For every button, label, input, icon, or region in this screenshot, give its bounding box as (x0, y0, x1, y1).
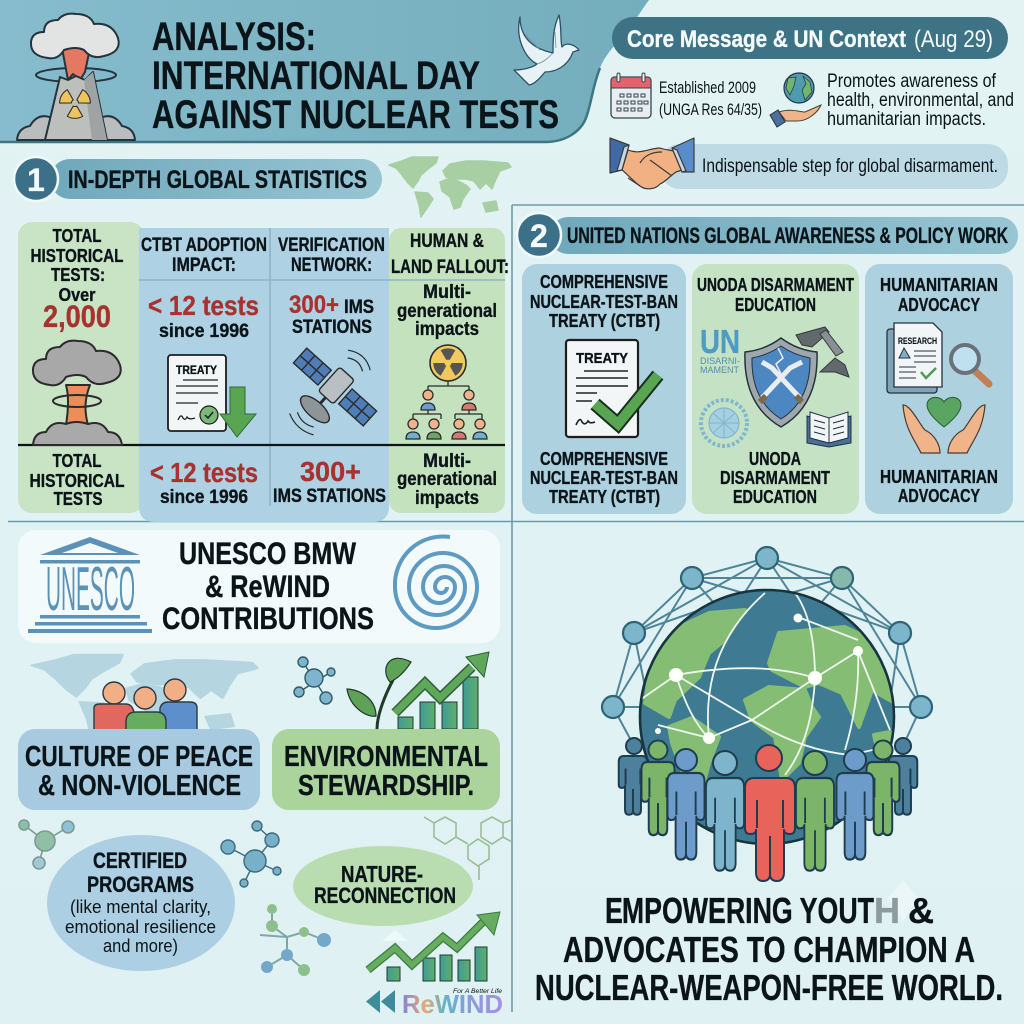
closing statement: EMPOWERING YOUTH & (605, 890, 934, 931)
panel: UNODA card (692, 264, 859, 514)
column 1 text: HISTORICAL (30, 470, 124, 491)
icon: research document: RESEARCH (898, 336, 937, 346)
column 2 text: since 1996 (160, 486, 248, 508)
section 2 heading (517, 213, 1018, 257)
promotes awareness text: humanitarian impacts. (827, 109, 986, 130)
icon: mushroom cloud (33, 341, 122, 445)
world map blue (32, 655, 258, 736)
icon: three people (94, 679, 197, 730)
panel: UNODA card: UNODA (749, 448, 801, 469)
title (152, 15, 559, 137)
panel: culture of peace: & NON-VIOLENCE (38, 770, 241, 802)
column 4 text: generational (397, 468, 497, 490)
column 3 text: IMS STATIONS (273, 486, 386, 507)
section 1 heading: IN-DEPTH GLOBAL STATISTICS (68, 166, 367, 194)
panel: nature reconnection: RECONNECTION (314, 883, 456, 908)
panel: CTBT card: NUCLEAR-TEST-BAN (530, 291, 678, 312)
promotes awareness text: Promotes awareness of (827, 71, 997, 92)
icon: research document (887, 323, 942, 393)
panel: humanitarian card (865, 264, 1013, 514)
panel: UNESCO heading: UNESCO BMW (179, 535, 356, 571)
panel: humanitarian card: ADVOCACY (898, 294, 981, 315)
panel: certified programs: PROGRAMS (87, 872, 194, 897)
icon: handshake (610, 138, 694, 189)
crowd of people (619, 738, 917, 881)
ReWIND logo: For A Better Life (453, 988, 502, 995)
column 2 text (141, 235, 267, 508)
promotes awareness text (827, 71, 1014, 130)
panel: certified programs (47, 835, 235, 971)
title: AGAINST NUCLEAR TESTS (152, 93, 559, 137)
closing statement (535, 890, 1003, 1008)
title: ANALYSIS: (152, 15, 316, 59)
panel: CTBT card (522, 264, 686, 514)
UN disarmament label: MAMENT (700, 365, 739, 375)
column 4 text: LAND FALLOUT: (391, 257, 509, 278)
column 1 text: HISTORICAL (30, 245, 124, 266)
panel: CTBT card: TREATY (CTBT) (549, 486, 660, 507)
column 4 text: impacts (415, 318, 479, 340)
icon: heart and hands (903, 397, 985, 453)
column 3 text: 300+ (289, 291, 339, 319)
panel: UNODA card: EDUCATION (735, 294, 816, 315)
column 1 text: 2,000 (43, 298, 111, 334)
column 4 text (391, 231, 509, 509)
panel: environmental stewardship: ENVIRONMENTAL (284, 741, 488, 773)
panel: CTBT card: COMPREHENSIVE (540, 271, 668, 292)
UN disarmament label (700, 323, 740, 375)
panel: nature reconnection (293, 846, 473, 926)
column 2 text: CTBT ADOPTION (141, 235, 267, 256)
icon: broken weapon (796, 327, 849, 377)
core message heading pill: (Aug 29) (914, 26, 993, 53)
icon: molecule upper left (19, 820, 74, 869)
column 1 text: TOTAL (52, 450, 102, 471)
established text: Established 2009 (659, 78, 756, 97)
column 4 text: Multi- (423, 281, 471, 303)
panel: UNODA card: DISARMAMENT (720, 467, 831, 488)
divider lines (8, 205, 1024, 1012)
icon: UN emblem (701, 400, 747, 446)
icon: treaty document with check mark: TREATY (576, 350, 628, 367)
icon: treaty document with down arrow (168, 355, 256, 437)
icon: satellite (264, 325, 397, 459)
column 3 text: STATIONS (292, 317, 372, 338)
icon: globe in hand (770, 73, 821, 127)
column 4 text: generational (397, 300, 497, 322)
header banner (0, 0, 649, 142)
panel: CTBT card: TREATY (CTBT) (549, 310, 660, 331)
panel: CTBT card: COMPREHENSIVE (540, 448, 668, 469)
icon: radiation family tree (406, 345, 487, 439)
panel: humanitarian card: HUMANITARIAN (880, 466, 998, 487)
panel: nature reconnection: NATURE- (341, 861, 423, 887)
globe network illustration (602, 547, 932, 881)
column 2 text: IMPACT: (172, 255, 236, 276)
icon: magnifier (951, 345, 989, 384)
column 1 text: TESTS: (51, 264, 105, 285)
column 2 text: < 12 tests (148, 290, 259, 321)
white watermark diamond (888, 880, 918, 922)
column 1 text: TESTS (54, 488, 102, 509)
network lines and nodes (602, 547, 932, 750)
icon: shield with swords (745, 338, 817, 427)
column 4 text: HUMAN & (410, 231, 484, 252)
column 3 text: 300+ (300, 456, 361, 487)
established text (659, 78, 762, 119)
column 2 text: < 12 tests (150, 457, 258, 488)
column 3 text: VERIFICATION (278, 235, 385, 256)
column 1 text: Over (58, 284, 96, 305)
panel: certified programs: (like mental clarity, (70, 896, 211, 917)
UN disarmament label: UN (700, 323, 740, 360)
established text: (UNGA Res 64/35) (659, 100, 762, 119)
panel: humanitarian card: HUMANITARIAN (880, 274, 998, 295)
icon: open book (807, 412, 851, 447)
panel: CTBT card: NUCLEAR-TEST-BAN (530, 467, 678, 488)
icon: UNESCO temple logo (28, 537, 152, 633)
panel: environmental stewardship: STEWARDSHIP. (298, 770, 474, 802)
icon: molecule upper middle (294, 657, 335, 704)
UN disarmament label: DISARNI- (700, 356, 740, 366)
icon: molecule lower (260, 904, 331, 976)
panel: certified programs: emotional resilience (65, 916, 216, 937)
panel: environmental stewardship (272, 729, 500, 810)
column 3 text (273, 235, 386, 507)
panel: statistics table (18, 222, 509, 522)
icon: molecule center (221, 821, 281, 887)
panel: UNODA card: EDUCATION (733, 486, 817, 507)
column 1 text (30, 225, 124, 509)
section 1 heading: 1 (27, 162, 45, 198)
column 4 text: impacts (415, 487, 479, 509)
icon: hexagon molecule (424, 817, 512, 880)
icon: treaty document with down arrow: TREATY (176, 363, 217, 377)
column 2 text: since 1996 (159, 320, 249, 342)
panel: UNESCO heading: & ReWIND (205, 568, 330, 604)
icon: treaty document with check mark (566, 340, 658, 437)
panel: humanitarian card: ADVOCACY (898, 485, 981, 506)
core message heading pill (612, 17, 1008, 59)
disarmament callout (660, 144, 1008, 189)
icon: nuclear explosion from silo (17, 14, 135, 140)
column 4 text: Multi- (423, 450, 471, 472)
icon: dove (514, 15, 579, 85)
column 1 text: TOTAL (52, 225, 102, 246)
panel: certified programs: and more) (103, 935, 178, 956)
panel: UNESCO heading: UNESCO (46, 555, 135, 624)
panel: UNODA card: UNODA DISARMAMENT (697, 274, 855, 295)
panel: UNESCO heading: CONTRIBUTIONS (162, 600, 374, 636)
globe (640, 590, 895, 844)
icon: calendar (611, 73, 651, 118)
title: INTERNATIONAL DAY (152, 54, 480, 98)
ReWIND logo: ReWIND (402, 989, 503, 1019)
section 1 heading (14, 157, 382, 201)
panel: culture of peace: CULTURE OF PEACE (25, 741, 253, 773)
core message heading pill: Core Message & UN Context (627, 26, 906, 53)
icon: plant with growth chart (347, 652, 489, 729)
icon: bottom growth chart (368, 912, 500, 981)
icon: spiral (395, 536, 477, 628)
panel: UNESCO heading (18, 530, 500, 643)
column 3 text: IMS (344, 297, 374, 318)
panel: certified programs: CERTIFIED (93, 848, 187, 873)
panel: culture of peace (18, 729, 260, 810)
column 3 text: NETWORK: (291, 255, 372, 276)
world map green (389, 157, 511, 217)
section 2 heading: 2 (530, 218, 548, 254)
